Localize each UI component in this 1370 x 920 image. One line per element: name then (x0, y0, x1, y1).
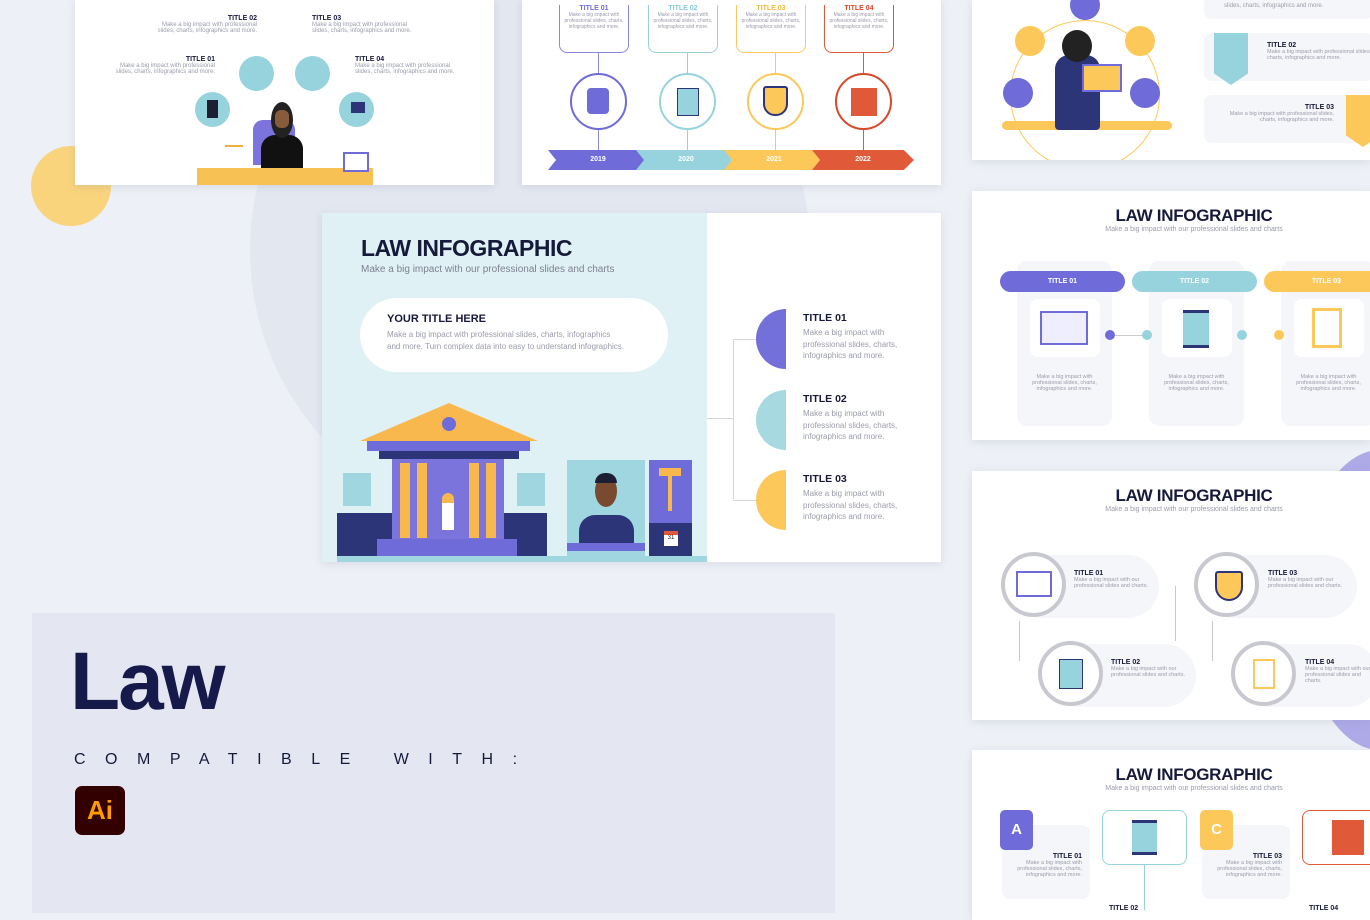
item: title 03: Make a big impact with professional slides, charts, infographics and more. (803, 489, 897, 521)
list item 1 partial: slides, charts, infographics and more. (1224, 3, 1323, 9)
letter cards: TITLE 04 (1309, 905, 1338, 912)
arrow timeline years: 2022 (855, 156, 871, 163)
list item title 03 (1204, 95, 1370, 143)
callout: your title here: YOUR TITLE HERE (387, 313, 486, 325)
letter cards: C (1211, 821, 1222, 838)
letter cards: TITLE 03 (1253, 853, 1282, 860)
timeline items: TITLE 01 (579, 5, 609, 12)
column cards: TITLE 01 (1048, 278, 1077, 285)
timeline items: TITLE 04 (844, 5, 874, 12)
list item title 03: Make a big impact with professional slides, charts, infographics and more. (1230, 111, 1334, 123)
heading (1105, 206, 1283, 233)
illustration: courthouse (337, 403, 707, 562)
title: Law: Law (70, 636, 223, 727)
list item title 02: TITLE 02 (1267, 42, 1296, 49)
illustration: judge at desk (197, 102, 373, 185)
heading (361, 235, 614, 275)
text: title 01: Make a big impact with professional slides, charts, infographics and more. (116, 63, 215, 75)
list item title 03: TITLE 03 (1305, 104, 1334, 111)
text: title 03: TITLE 03 (312, 15, 341, 22)
purple blob right (1300, 450, 1370, 750)
text: title 01: TITLE 01 (186, 56, 215, 63)
timeline items: Make a big impact with professional slides, charts, infographics and more. (654, 12, 712, 30)
steps: TITLE 03 (1268, 570, 1297, 577)
letter cards: A (1011, 821, 1022, 838)
column cards: TITLE 02 (1180, 278, 1209, 285)
item: title 01: TITLE 01 (803, 312, 847, 324)
heading: Make a big impact with our professional slides and charts (1105, 785, 1283, 792)
text: title 02: TITLE 02 (228, 15, 257, 22)
icon circles (195, 56, 374, 127)
timeline items: Make a big impact with professional slides, charts, infographics and more. (565, 12, 623, 30)
steps: TITLE 02 (1111, 659, 1140, 666)
column cards (1000, 261, 1370, 426)
text: title 04: Make a big impact with professional slides, charts, infographics and more. (355, 63, 454, 75)
item: title 02 (756, 390, 897, 450)
item: title 02: TITLE 02 (803, 393, 847, 405)
column cards: TITLE 03 (1312, 278, 1341, 285)
letter cards: TITLE 02 (1109, 905, 1138, 912)
panel: top-left judge slide (75, 0, 494, 185)
callout: your title here: and more. Turn complex data into easy to understand infographics. (387, 342, 624, 351)
text: title 03: Make a big impact with professional slides, charts, infographics and more. (312, 22, 411, 34)
heading: Make a big impact with our professional slides and charts (1105, 226, 1283, 233)
column cards: Make a big impact with professional slides, charts, infographics and more. (1296, 374, 1361, 392)
timeline items: Make a big impact with professional slides, charts, infographics and more. (830, 12, 888, 30)
icon: Ai (75, 786, 125, 835)
item: title 03 (733, 470, 897, 530)
timeline items: TITLE 02 (668, 5, 698, 12)
timeline items: TITLE 03 (756, 5, 786, 12)
text: title 02: Make a big impact with professional slides, charts, infographics and more. (158, 22, 257, 34)
column cards: Make a big impact with professional slides, charts, infographics and more. (1032, 374, 1097, 392)
arrow timeline years: 2021 (766, 156, 782, 163)
item: title 03: TITLE 03 (803, 473, 847, 485)
letter cards (1000, 810, 1370, 912)
text: title 03 (312, 15, 411, 34)
decorative yellow circle (31, 146, 111, 226)
heading: Make a big impact with our professional slides and charts (361, 264, 614, 275)
text: compatible with: COMPATIBLE WITH: (74, 751, 537, 768)
item: title 02: Make a big impact with professional slides, charts, infographics and more. (803, 409, 897, 441)
text: title 02 (158, 15, 257, 34)
list item 1 partial (1204, 0, 1370, 19)
item: title 01: Make a big impact with professional slides, charts, infographics and more. (803, 328, 897, 360)
list item title 02 (1204, 33, 1370, 81)
column cards: Make a big impact with professional slides, charts, infographics and more. (1164, 374, 1229, 392)
arrow timeline years (548, 150, 914, 170)
steps (1001, 552, 1370, 707)
heading: LAW INFOGRAPHIC (1116, 765, 1272, 784)
illustration: courthouse: 31 (668, 535, 674, 541)
letter cards: Make a big impact with professional slides, charts, infographics and more. (1017, 860, 1082, 878)
list item title 02: Make a big impact with professional slides, charts, infographics and more. (1267, 49, 1370, 61)
steps: Make a big impact with our professional slides and charts. (1111, 666, 1185, 678)
timeline items (559, 5, 894, 150)
text: title 04 (355, 56, 454, 75)
heading: LAW INFOGRAPHIC (361, 235, 572, 261)
arrow timeline years: 2020 (678, 156, 694, 163)
panel: bottom-left title block (32, 613, 835, 913)
heading: Make a big impact with our professional slides and charts (1105, 506, 1283, 513)
heading (1105, 765, 1283, 792)
heading: LAW INFOGRAPHIC (1116, 206, 1272, 225)
panel: right top lawyer slide (972, 0, 1370, 160)
text: title 01 (116, 56, 215, 75)
letter cards: TITLE 01 (1053, 853, 1082, 860)
heading: LAW INFOGRAPHIC (1116, 486, 1272, 505)
letter cards: Make a big impact with professional slides, charts, infographics and more. (1217, 860, 1282, 878)
panel: main center slide (322, 213, 941, 562)
connector lines (707, 418, 733, 419)
callout: your title here: Make a big impact with professional slides, charts, infographics (387, 330, 610, 339)
panel: top-middle timeline slide (522, 0, 941, 185)
callout: your title here (360, 298, 668, 372)
arrow timeline years: 2019 (590, 156, 606, 163)
panel: right 3 four-step slide (972, 471, 1370, 720)
icon: Ai: Ai (87, 795, 113, 825)
text: title 04: TITLE 04 (355, 56, 384, 63)
steps: Make a big impact with our professional slides and charts. (1074, 577, 1148, 589)
item: title 01 (734, 309, 897, 369)
left light blue area (322, 213, 707, 562)
steps: TITLE 01 (1074, 570, 1103, 577)
steps: Make a big impact with our professional slides and charts. (1268, 577, 1342, 589)
illustration: woman with icons (1002, 0, 1172, 160)
steps: Make a big impact with our professional slides and charts. (1305, 666, 1370, 684)
background circle (250, 0, 810, 530)
heading (1105, 486, 1283, 513)
panel: right 4 A-C slide (972, 750, 1370, 920)
panel: right 2 three titles slide (972, 191, 1370, 440)
steps: TITLE 04 (1305, 659, 1334, 666)
timeline items: Make a big impact with professional slides, charts, infographics and more. (742, 12, 800, 30)
